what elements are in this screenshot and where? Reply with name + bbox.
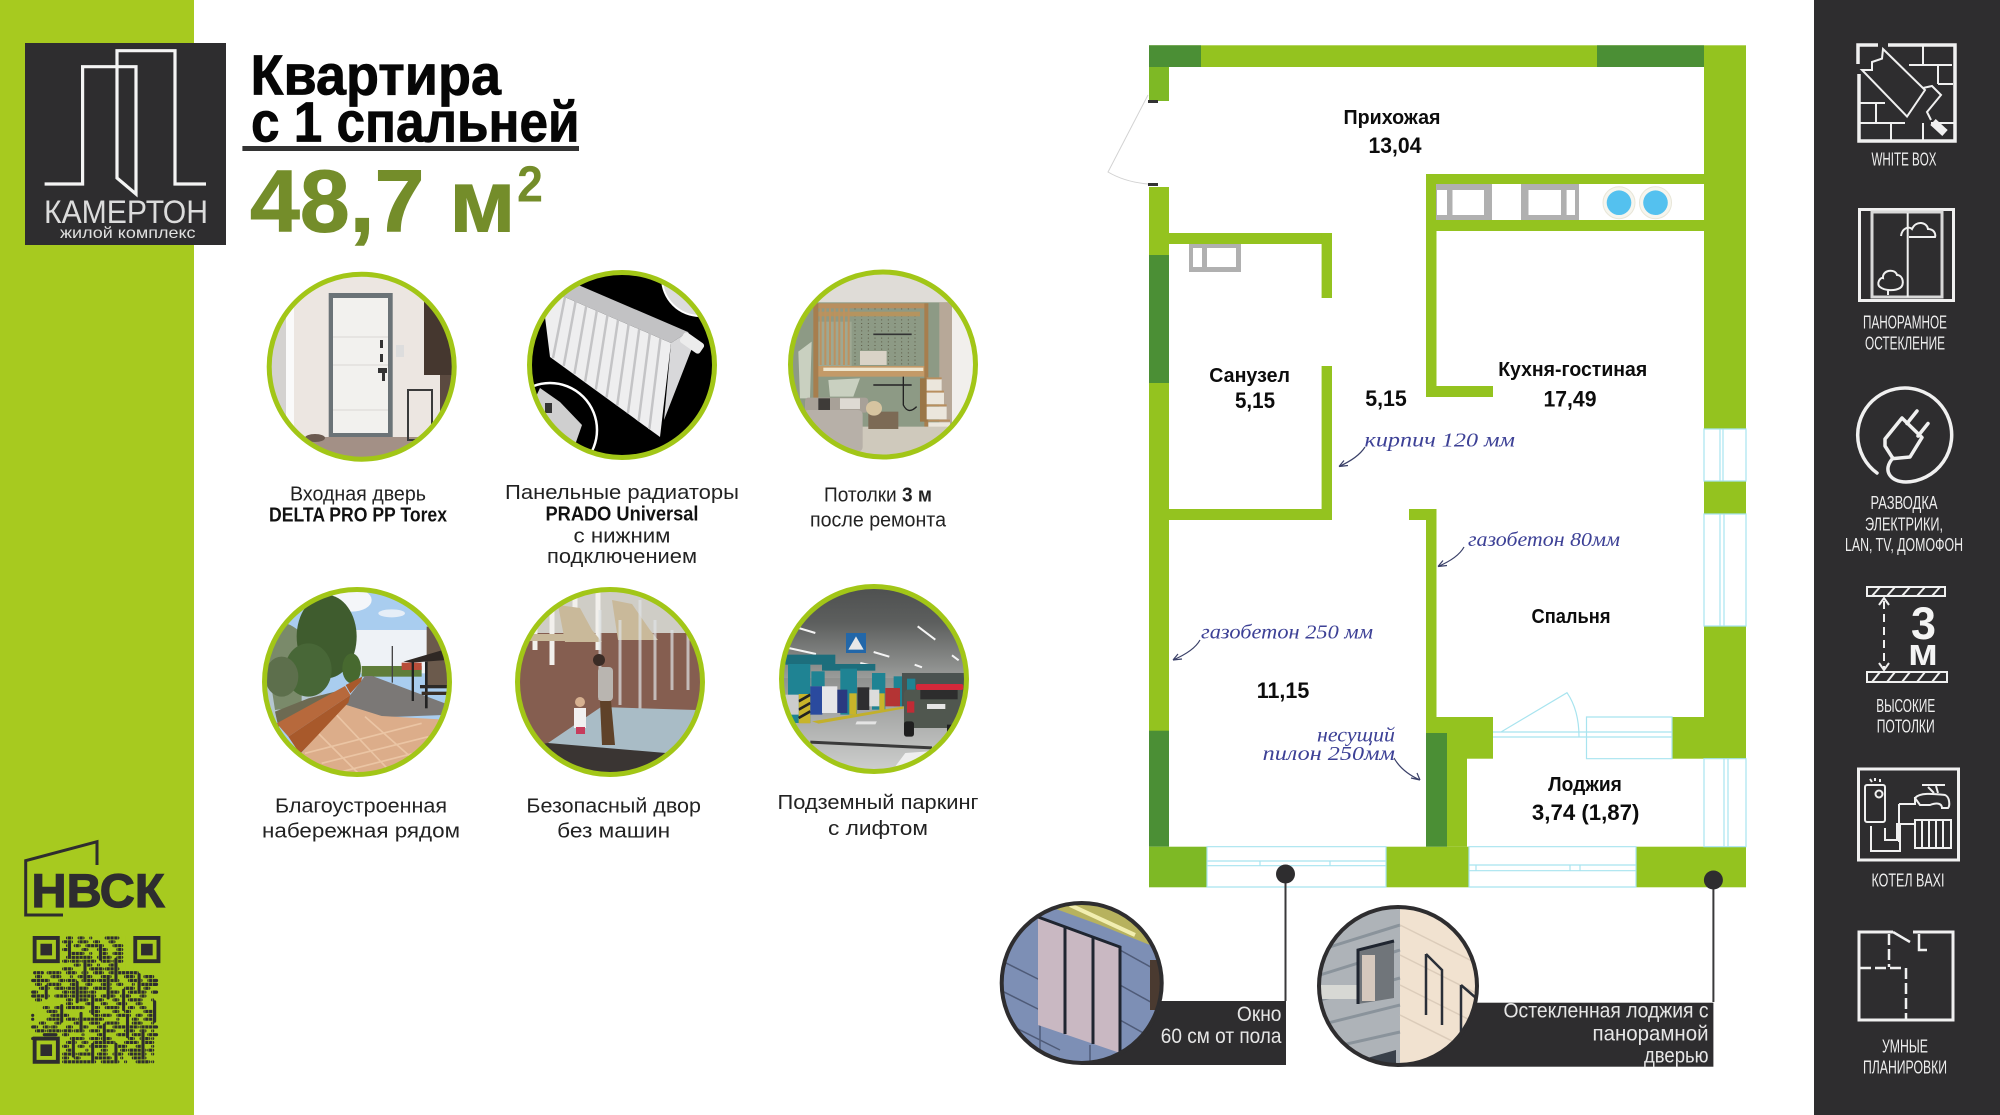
feature: wiring: ЭЛЕКТРИКИ, xyxy=(1865,514,1943,534)
caption: underground parking: с лифтом xyxy=(828,818,928,840)
QR code xyxy=(33,936,158,1064)
outer walls xyxy=(1149,45,1746,887)
caption: ceilings xyxy=(810,485,947,532)
feature: panoramic glazing: ПАНОРАМНОЕ xyxy=(1863,312,1947,332)
caption: embankment: Благоустроенная xyxy=(275,796,447,818)
area figure: 48,7 м xyxy=(250,152,516,251)
wall annotations xyxy=(1173,430,1620,780)
caption: ceilings: Потолки 3 м xyxy=(824,485,932,507)
room labels: 11,15 xyxy=(1257,678,1309,703)
icon: window xyxy=(1860,210,1954,300)
room labels: Санузел xyxy=(1209,365,1290,387)
logo: Камертон: КАМЕРТОН xyxy=(44,194,208,230)
feature: smart layouts xyxy=(1859,932,1953,1078)
room labels: 3,74 (1,87) xyxy=(1532,800,1639,825)
icon: ceiling height 3 m: м xyxy=(1908,632,1938,674)
caption: entrance door xyxy=(269,484,447,527)
caption: ceilings: после ремонта xyxy=(810,510,947,532)
room labels: Прихожая xyxy=(1344,107,1440,129)
feature: high ceilings: ВЫСОКИЕ xyxy=(1876,696,1935,716)
feature: high ceilings xyxy=(1867,587,1947,736)
room labels: Лоджия xyxy=(1548,774,1622,796)
caption: panel radiators: PRADO Universal xyxy=(546,504,698,526)
callout: window: 60 см от пола xyxy=(1161,1025,1282,1048)
wall annotations: кирпич 120 мм xyxy=(1364,430,1515,452)
room labels: Кухня-гостиная xyxy=(1498,359,1647,381)
title: Квартира xyxy=(250,43,502,107)
developer logo: НВСК: НВСК xyxy=(32,864,165,917)
caption: safe courtyard xyxy=(526,796,701,843)
icon: plug xyxy=(1858,388,1952,482)
caption: safe courtyard: Безопасный двор xyxy=(526,796,701,818)
callout: window xyxy=(998,864,1295,1068)
balcony door xyxy=(1493,693,1672,759)
callout: glazed loggia: панорамной xyxy=(1592,1023,1708,1046)
caption: underground parking xyxy=(778,792,978,840)
photo: embankment xyxy=(262,587,452,777)
title: с 1 спальней xyxy=(251,91,580,155)
room labels: 13,04 xyxy=(1368,133,1422,158)
room labels xyxy=(1209,107,1647,825)
icon: ceiling height 3 m: 3 xyxy=(1911,598,1936,649)
photo: safe courtyard xyxy=(515,585,710,780)
caption: embankment xyxy=(262,796,460,843)
feature: smart layouts: ПЛАНИРОВКИ xyxy=(1863,1058,1947,1078)
caption: safe courtyard: без машин xyxy=(557,821,670,843)
kitchen fixtures xyxy=(1436,184,1672,220)
icon: brick wall and roller xyxy=(1858,45,1955,141)
floor plan xyxy=(1108,45,1746,887)
room labels: 5,15 xyxy=(1235,388,1275,413)
callout: glazed loggia xyxy=(1318,870,1723,1069)
caption: panel radiators: с нижним xyxy=(574,526,670,548)
photo: loft interior with 3 m ceilings xyxy=(788,270,978,460)
feature: white box: WHITE BOX xyxy=(1872,150,1936,170)
room labels: 5,15 xyxy=(1365,386,1407,411)
room labels: 17,49 xyxy=(1544,387,1596,412)
caption: entrance door: Входная дверь xyxy=(290,484,426,506)
area figure: 2 xyxy=(517,156,543,213)
left green sidebar xyxy=(0,0,194,1115)
title xyxy=(242,43,580,155)
kitchen and bedroom partition walls xyxy=(1409,174,1704,847)
room labels: Спальня xyxy=(1532,606,1610,628)
feature: wiring xyxy=(1845,388,1963,555)
entrance door xyxy=(1108,95,1158,186)
icon: ceiling height 3 m xyxy=(1867,587,1947,682)
icon: boiler with radiator xyxy=(1858,769,1958,860)
feature: wiring: РАЗВОДКА xyxy=(1870,493,1938,513)
wall annotations: несущий xyxy=(1317,725,1395,747)
callout: glazed loggia: дверью xyxy=(1644,1045,1708,1068)
feature: high ceilings: ПОТОЛКИ xyxy=(1877,716,1935,736)
photo: underground parking xyxy=(779,584,969,774)
icon: plan xyxy=(1859,932,1953,1020)
caption: panel radiators: Панельные радиаторы xyxy=(505,482,739,504)
logo: Камертон: жилой комплекс xyxy=(60,225,196,242)
right dark sidebar xyxy=(1814,0,2000,1115)
feature: smart layouts: УМНЫЕ xyxy=(1882,1036,1928,1056)
caption: entrance door: DELTA PRO PP Torex xyxy=(269,505,447,527)
feature: panoramic glazing: ОСТЕКЛЕНИЕ xyxy=(1865,334,1945,354)
feature: boiler: КОТЕЛ BAXI xyxy=(1872,870,1944,890)
logo: Камертон xyxy=(25,43,226,245)
windows xyxy=(1207,429,1746,887)
photo: panel radiator xyxy=(527,270,717,460)
bathroom walls xyxy=(1149,233,1332,520)
caption: underground parking: Подземный паркинг xyxy=(778,792,978,814)
wall annotations: газобетон 250 мм xyxy=(1201,622,1373,644)
photo: entrance door xyxy=(266,272,457,462)
callout: window: Окно xyxy=(1237,1003,1282,1026)
feature: boiler xyxy=(1858,769,1958,890)
feature: white box xyxy=(1858,45,1955,170)
caption: embankment: набережная рядом xyxy=(262,821,460,843)
caption: panel radiators xyxy=(505,482,739,568)
developer logo: НВСК xyxy=(26,842,165,917)
callout: glazed loggia: Остекленная лоджия с xyxy=(1504,1000,1708,1023)
feature: panoramic glazing xyxy=(1860,210,1954,354)
wall annotations: газобетон 80мм xyxy=(1468,529,1620,551)
caption: panel radiators: подключением xyxy=(547,546,697,568)
wall annotations: пилон 250мм xyxy=(1263,743,1395,765)
bathroom fixture xyxy=(1189,244,1241,272)
